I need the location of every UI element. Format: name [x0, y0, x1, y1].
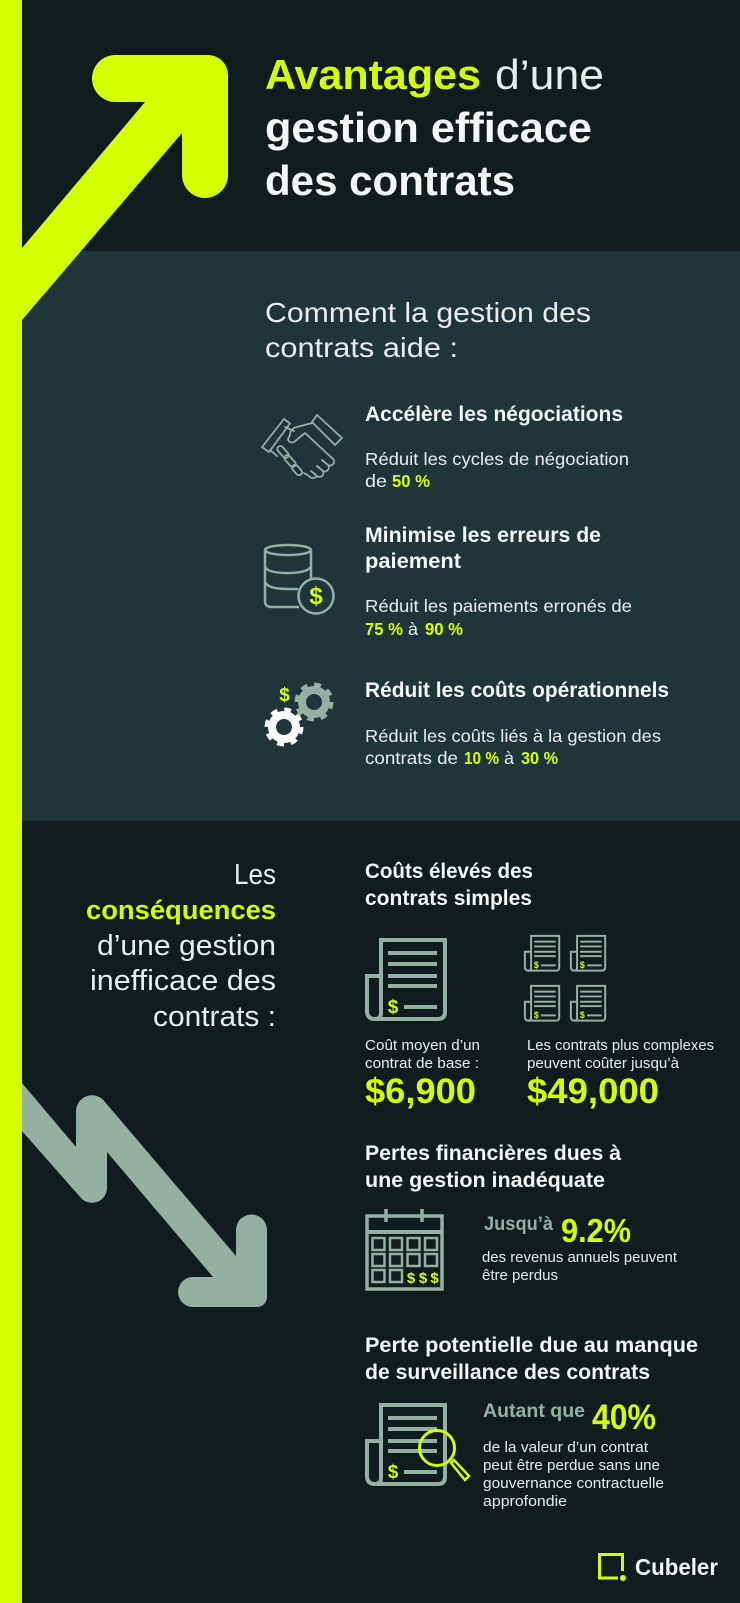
benefit: lower operating costs: 30 % [521, 748, 558, 768]
stat: revenue lost: des revenus annuels peuvent [482, 1249, 678, 1266]
stat: base contract cost: contrat de base : [365, 1055, 479, 1072]
benefit: fewer payment errors [365, 524, 632, 639]
stat: complex contract cost: $49,000 [527, 1072, 659, 1111]
stat: base contract cost [365, 1037, 480, 1111]
icon: complex contracts bottom left: $ [534, 1010, 539, 1020]
stat: base contract cost: Coût moyen d’un [365, 1037, 480, 1054]
section heading: consequences: conséquences [86, 895, 276, 925]
arrow: falling sage [22, 1083, 267, 1307]
benefit: lower operating costs: Réduit les coûts liés à la gestion des [365, 726, 661, 746]
arrow: rising lime [22, 55, 228, 320]
stat: complex contract cost [527, 1037, 714, 1111]
title: Avantages [265, 51, 481, 98]
section heading: consequences: inefficace des [90, 965, 276, 997]
stat: contract value lost [483, 1398, 664, 1510]
heading: potential loss: Perte potentielle due au manque [365, 1334, 698, 1357]
benefit: lower operating costs: Réduit les coûts opérationnels [365, 679, 669, 702]
benefit: fewer payment errors: Réduit les paiements erronés de [365, 596, 632, 616]
icon: database with dollar [265, 545, 334, 614]
icon: calendar with dollars: $ [419, 1270, 428, 1287]
heading: financial losses: une gestion inadéquate [365, 1169, 605, 1192]
icon: complex contracts top right: $ [580, 960, 585, 970]
title: gestion efficace [265, 104, 592, 151]
stat: base contract cost: $6,900 [365, 1072, 476, 1111]
icon: gears with dollar: $ [279, 685, 290, 706]
stat: revenue lost: 9.2% [561, 1212, 631, 1249]
icon: complex contracts bottom right [571, 986, 605, 1021]
panel: how contract management helps [22, 251, 740, 821]
heading: potential loss: de surveillance des contrats [365, 1361, 650, 1384]
benefit: fewer payment errors: Minimise les erreurs de [365, 524, 601, 547]
heading: potential loss [365, 1334, 698, 1384]
benefit: fewer payment errors: à [408, 619, 418, 639]
icon: complex contracts top left: $ [534, 960, 539, 970]
benefit: lower operating costs: 10 % [464, 748, 499, 768]
title: d’une [495, 51, 604, 98]
benefit: lower operating costs: contrats de [365, 748, 458, 768]
stat: contract value lost: approfondie [483, 1493, 567, 1510]
benefit: faster negotiations [365, 403, 629, 491]
icon: large contract document [367, 940, 445, 1019]
title: des contrats [265, 157, 515, 204]
benefit: lower operating costs: à [504, 748, 514, 768]
icon: complex contracts bottom left [525, 986, 559, 1021]
benefit: fewer payment errors: 75 % [365, 619, 403, 639]
icon: complex contracts top right [571, 936, 605, 971]
stat: contract value lost: peut être perdue sans une [483, 1457, 660, 1474]
section heading: consequences: d’une gestion [97, 930, 276, 962]
stat: revenue lost: Jusqu’à [484, 1214, 553, 1235]
heading: high cost of simple contracts [365, 860, 533, 910]
logo: Cubeler [600, 1554, 718, 1581]
section heading: consequences: contrats : [153, 1001, 276, 1033]
section heading: how it helps: Comment la gestion des [265, 297, 591, 328]
benefit: faster negotiations: Accélère les négociations [365, 403, 623, 426]
logo: Cubeler: Cubeler [635, 1554, 718, 1580]
stat: contract value lost: de la valeur d’un contrat [483, 1439, 649, 1456]
icon: complex contracts top left [525, 936, 559, 971]
section heading: consequences [86, 859, 276, 1033]
benefit: faster negotiations: Réduit les cycles de négociation [365, 449, 629, 469]
icon: database with dollar: $ [309, 583, 323, 610]
heading: high cost of simple contracts: Coûts élevés des [365, 860, 533, 883]
icon: large contract document: $ [388, 997, 399, 1018]
stat: complex contract cost: peuvent coûter jusqu’à [527, 1055, 680, 1072]
icon: contract under magnifier [367, 1405, 469, 1484]
title [265, 51, 604, 204]
heading: financial losses [365, 1142, 621, 1192]
stat: revenue lost: être perdus [482, 1267, 558, 1284]
section heading: how it helps: contrats aide : [265, 332, 458, 363]
benefit: lower operating costs [365, 679, 669, 768]
stat: complex contract cost: Les contrats plus complexes [527, 1037, 714, 1054]
section heading: how it helps [265, 297, 591, 363]
stat: contract value lost: Autant que [483, 1401, 585, 1422]
icon: contract under magnifier: $ [388, 1462, 399, 1483]
icon: gears with dollar [267, 685, 331, 744]
icon: calendar with dollars: $ [430, 1270, 439, 1287]
heading: high cost of simple contracts: contrats simples [365, 887, 532, 910]
benefit: faster negotiations: 50 % [392, 471, 430, 491]
icon: calendar with dollars: $ [407, 1270, 416, 1287]
icon: handshake [262, 415, 342, 478]
benefit: fewer payment errors: paiement [365, 550, 461, 573]
benefit: faster negotiations: de [365, 471, 387, 491]
stat: revenue lost [482, 1212, 678, 1284]
stat: contract value lost: gouvernance contractuelle [483, 1475, 664, 1492]
lime vertical bar [0, 0, 22, 1603]
icon: complex contracts bottom right: $ [580, 1010, 585, 1020]
section heading: consequences: Les [234, 859, 276, 891]
stat: contract value lost: 40% [592, 1398, 656, 1437]
icon: calendar with dollars [367, 1209, 442, 1289]
benefit: fewer payment errors: 90 % [425, 619, 463, 639]
heading: financial losses: Pertes financières dues à [365, 1142, 621, 1165]
